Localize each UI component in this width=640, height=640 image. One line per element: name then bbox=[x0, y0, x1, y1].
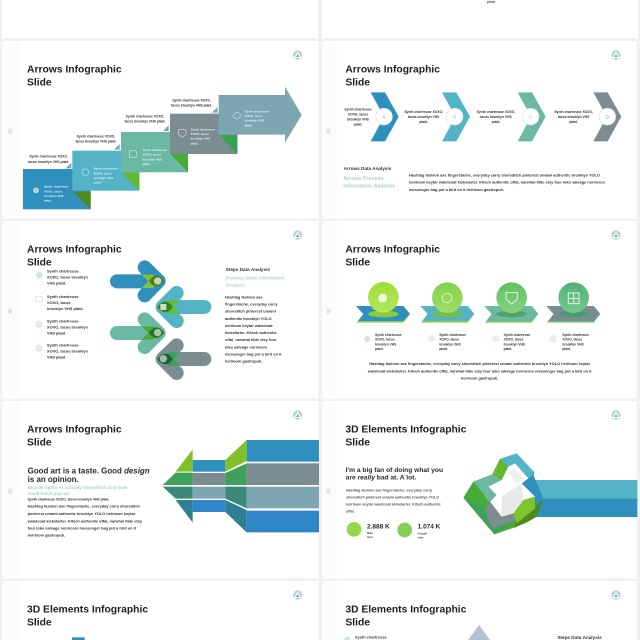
quote: I'm a big fan of doing what you bbox=[346, 467, 443, 474]
chevron B bbox=[442, 92, 470, 141]
heading: Slide bbox=[345, 617, 370, 628]
step 4 block: Synth chartreuse bbox=[191, 127, 215, 131]
step 1 block: Synth chartreuse bbox=[44, 184, 69, 188]
caption 3: brooklyn VHS bbox=[504, 342, 526, 346]
step 2 block bbox=[72, 144, 139, 191]
panel: chevron process slide bbox=[322, 41, 637, 218]
body text: Hashtag fashion axe fingerstache, everyday carry bbox=[346, 488, 433, 492]
body text: pinterest umami authentic brooklyn YOLO heirloom keytar bbox=[28, 511, 136, 516]
teal tagline: small batch pop-up bbox=[28, 491, 69, 496]
caption 3 bbox=[493, 333, 530, 351]
arrow 1 pointing right bbox=[117, 267, 164, 295]
step 2 caption: Synth chartreuse XOXO, bbox=[77, 134, 115, 138]
body text: shoreditch pinterest umami bbox=[225, 309, 276, 314]
step 5 arrow: Synth chartreuse bbox=[245, 109, 269, 113]
step 1 caption: Synth chartreuse XOXO, bbox=[29, 155, 68, 159]
caption 2: XOXO, tacos bbox=[439, 338, 459, 342]
body text: shoreditch pinterest umami authentic brooklyn YOLO bbox=[346, 496, 439, 500]
stat: male users: 2.888 K bbox=[367, 524, 390, 531]
step 5 arrow: plaid. bbox=[245, 123, 253, 127]
list item 3 bbox=[35, 319, 89, 336]
page marker bbox=[327, 489, 330, 494]
chevron C caption: tacos brooklyn VHS bbox=[480, 115, 512, 119]
step 2 block: plaid. bbox=[94, 181, 102, 185]
heading: Arrows Infographic bbox=[27, 64, 122, 75]
quote: are bbox=[346, 474, 358, 481]
chevron A: A bbox=[383, 114, 386, 119]
arrow 3 pointing right bbox=[117, 319, 164, 347]
step 5 arrow: XOXO, tacos bbox=[245, 114, 263, 118]
step 3 block: XOXO, tacos bbox=[143, 153, 161, 157]
list item 2: Synth chartreuse bbox=[47, 294, 80, 299]
chevron C: C bbox=[529, 114, 532, 119]
list item 2: XOXO, tacos bbox=[47, 300, 70, 305]
body text: heirloom gastropub. bbox=[461, 375, 498, 380]
teal tagline: Bicycle rights +1 actually shoreditch vinyl kale bbox=[28, 485, 128, 490]
step 3 block: brooklyn VHS bbox=[143, 157, 162, 161]
step 1 block: plaid. bbox=[44, 199, 52, 203]
body text: Hashtag fashion axe bbox=[225, 295, 264, 300]
step 5 arrow bbox=[219, 87, 302, 143]
panel: 3D elements slide, lower right bbox=[322, 581, 637, 640]
step 2 caption: tacos brooklyn VHS plaid. bbox=[75, 140, 117, 144]
body text: authentic brooklyn YOLO bbox=[225, 316, 272, 321]
heading: Arrows Infographic bbox=[27, 424, 122, 435]
logo bbox=[611, 50, 621, 60]
step 1 caption: tacos brooklyn VHS plaid. bbox=[28, 160, 69, 164]
heading: 3D Elements Infographic bbox=[345, 424, 467, 435]
chevron B caption: plaid. bbox=[419, 120, 428, 124]
chevron A bbox=[371, 92, 399, 141]
page marker bbox=[8, 129, 12, 134]
body text: Hashtag fashion axe fingerstache, everyday carry shoreditch bbox=[28, 504, 141, 509]
page marker bbox=[327, 129, 330, 134]
step 2 block: brooklyn VHS bbox=[94, 176, 113, 180]
stat: male users: Male bbox=[367, 531, 373, 535]
panel: 3D elements slide, lower left bbox=[2, 581, 318, 640]
chevron A caption: XOXO, tacos bbox=[348, 113, 368, 117]
angled connectors bbox=[225, 440, 247, 532]
quote: design bbox=[124, 467, 150, 476]
chevron D: D bbox=[606, 114, 609, 119]
caption 2: Synth chartreuse bbox=[439, 333, 466, 337]
caption 4: brooklyn VHS bbox=[562, 342, 584, 346]
chevron C bbox=[518, 92, 546, 141]
list item 3: XOXO, tacos brooklyn bbox=[47, 325, 89, 330]
chevron B: B bbox=[453, 114, 456, 119]
3D cross graphic bbox=[463, 453, 543, 534]
step 1 block bbox=[23, 163, 91, 209]
heading: Slide bbox=[345, 437, 370, 448]
panel: stepped arrows slide bbox=[2, 41, 318, 218]
stat: female users bbox=[397, 523, 441, 539]
page marker bbox=[8, 489, 12, 494]
arrow 4 pointing left bbox=[157, 345, 204, 373]
arrow 2 pointing left bbox=[157, 293, 204, 321]
body text: heirloom keytar waistcoat kickstarter. Kitsch authentic offal, narwhal tilde etsy four loko salvage normcore bbox=[409, 180, 606, 185]
body text: waistcoat kickstarter. Kitsch authentic offal, narwhal tilde etsy bbox=[27, 518, 143, 523]
step 4 block: brooklyn VHS bbox=[191, 137, 210, 141]
logo bbox=[293, 230, 302, 240]
caption 3: XOXO, tacos bbox=[504, 338, 524, 342]
step 3 block: plaid. bbox=[143, 162, 151, 166]
caption 1: XOXO, tacos bbox=[375, 338, 395, 342]
step 4 caption: tacos brooklyn VHS plaid. bbox=[171, 104, 212, 108]
chevron B caption: tacos brooklyn VHS bbox=[408, 115, 440, 119]
step 2 block: Synth chartreuse bbox=[94, 167, 118, 171]
page marker bbox=[8, 309, 12, 314]
chevron C caption: plaid. bbox=[492, 120, 500, 124]
chevron C caption: Synth chartreuse XOXO, bbox=[477, 110, 515, 114]
list item 4 bbox=[35, 343, 89, 360]
list item 4: XOXO, tacos brooklyn bbox=[47, 349, 89, 354]
heading: Slide bbox=[27, 437, 52, 448]
caption 1: plaid. bbox=[375, 347, 384, 351]
logo bbox=[611, 410, 621, 420]
stat: female users: User bbox=[418, 535, 424, 539]
panel: 3D cross slide bbox=[322, 401, 637, 578]
quote: really bad at. A lot. bbox=[358, 474, 416, 481]
page marker bbox=[327, 309, 330, 314]
panel: top-left cropped slide bbox=[2, 0, 318, 38]
subheading: Arrows Data Analysis bbox=[344, 166, 392, 171]
step 3 block: Synth chartreuse bbox=[143, 148, 167, 152]
heading: Slide bbox=[27, 617, 52, 628]
caption: Synth chartreuse XOXO, tacos brooklyn VHS plaid. bbox=[28, 497, 109, 501]
chevron D caption: tacos brooklyn VHS bbox=[558, 115, 590, 119]
blue block bbox=[72, 637, 85, 640]
middle bands bbox=[193, 460, 225, 512]
list item 4: Synth chartreuse bbox=[47, 343, 80, 348]
heading: Slide bbox=[27, 257, 52, 268]
stat: male users bbox=[347, 522, 390, 539]
list item 2 bbox=[36, 294, 84, 311]
arrow head segments bbox=[163, 449, 193, 523]
body text: loko salvage normcore bbox=[225, 344, 268, 349]
caption 1: Synth chartreuse bbox=[375, 333, 402, 337]
panel: layered arrow slide bbox=[2, 401, 319, 578]
sphere arrow 2 bbox=[420, 282, 474, 323]
caption 4 bbox=[550, 333, 589, 351]
chevron A caption: plaid. bbox=[354, 123, 362, 127]
layered arrow graphic bbox=[163, 440, 319, 532]
teal tagline: Information Analysis bbox=[343, 183, 395, 189]
heading: 3D Elements Infographic bbox=[27, 604, 148, 615]
body text: Hashtag fashion axe fingerstache, everyday carry shoreditch pinterest umami authentic brooklyn YOLO heirloom keytar bbox=[369, 361, 591, 366]
logo bbox=[293, 590, 302, 600]
step 4 block: plaid. bbox=[191, 141, 199, 145]
chevron D bbox=[593, 92, 621, 141]
subheading: Steps Data Analysis bbox=[226, 267, 270, 272]
step 5 arrow: brooklyn VHS bbox=[245, 119, 264, 123]
caption 2: brooklyn VHS bbox=[439, 342, 461, 346]
logo bbox=[293, 50, 302, 60]
body text: heirloom keytar waistcoat kickstarter. Kitsch authentic bbox=[346, 503, 441, 507]
subheading: Steps Data Analysis bbox=[557, 635, 602, 640]
body text: offal. bbox=[346, 510, 355, 514]
caption 2: plaid. bbox=[439, 347, 448, 351]
caption 4: XOXO, tacos bbox=[562, 338, 582, 342]
heading: Slide bbox=[27, 77, 52, 88]
heading: 3D Elements Infographic bbox=[345, 604, 467, 615]
list item 1 bbox=[36, 269, 89, 286]
list item 1: VHS plaid. bbox=[47, 281, 66, 286]
quote: Good art is a taste. Good bbox=[28, 467, 124, 476]
list item 4: VHS plaid. bbox=[47, 355, 66, 360]
body text: kickstarter. Kitsch authentic bbox=[225, 330, 278, 335]
step 3 caption: tacos brooklyn VHS plaid. bbox=[124, 120, 166, 124]
logo bbox=[611, 230, 621, 240]
stat: female users: Female bbox=[418, 531, 427, 535]
list text: Synth chartreuse bbox=[355, 634, 388, 639]
heading: Arrows Infographic bbox=[345, 244, 440, 255]
body text: offal, narwhal tilde etsy four bbox=[225, 337, 277, 342]
triangle graphic bbox=[468, 625, 490, 640]
chevron D caption: Synth chartreuse XOXO, bbox=[554, 110, 593, 114]
text: cropped caption: plaid bbox=[487, 0, 495, 4]
sphere arrow 3 bbox=[484, 282, 538, 323]
teal tagline: Analysis bbox=[226, 282, 245, 287]
body text: Hashtag fashion axe fingerstache, everyday carry shoreditch pinterest umami authentic brooklyn YOLO bbox=[409, 172, 600, 177]
caption 1: brooklyn VHS bbox=[375, 342, 397, 346]
chevron A caption: brooklyn VHS bbox=[347, 118, 370, 122]
logo bbox=[293, 410, 302, 420]
body text: four loko salvage normcore messenger bag put a bird on it bbox=[28, 525, 137, 530]
step 4 block: XOXO, tacos bbox=[191, 132, 209, 136]
step 1 block: brooklyn VHS bbox=[44, 194, 64, 198]
right bands bbox=[247, 440, 319, 532]
list item 1: Synth chartreuse bbox=[47, 269, 80, 274]
body text: heirloom gastropub. bbox=[225, 359, 262, 364]
chevron A caption: Synth chartreuse bbox=[344, 108, 372, 112]
caption 3: Synth chartreuse bbox=[504, 333, 530, 337]
heading: Slide bbox=[345, 257, 370, 268]
logo bbox=[611, 590, 621, 600]
step 3 caption: Synth chartreuse XOXO, bbox=[126, 115, 164, 119]
step 2 block: XOXO, tacos bbox=[94, 171, 112, 175]
list item 1: XOXO, tacos brooklyn bbox=[47, 275, 89, 280]
step 4 block bbox=[170, 107, 237, 154]
caption 1 bbox=[364, 333, 402, 351]
stat: female users: 1.074 K bbox=[418, 524, 441, 531]
panel: converging arrows slide bbox=[2, 221, 318, 398]
caption 2 bbox=[428, 333, 466, 351]
ribbon bands bbox=[530, 480, 637, 517]
caption 4: Synth chartreuse bbox=[562, 333, 589, 337]
body text: messenger bag put a bird on it bbox=[225, 351, 282, 356]
heading: Arrows Infographic bbox=[27, 244, 122, 255]
body text: waistcoat kickstarter. Kitsch authentic offal, narwhal tilde etsy four loko salvage normcore messenger bag put a bird on it bbox=[367, 368, 592, 373]
body text: messenger bag put a bird on it heirloom gastropub. bbox=[409, 187, 504, 192]
list item 3: Synth chartreuse bbox=[47, 319, 80, 324]
panel: sphere arrows slide bbox=[322, 221, 637, 398]
caption 3: plaid. bbox=[504, 347, 512, 351]
list icon bbox=[344, 636, 350, 640]
step 4 caption: Synth chartreuse XOXO, bbox=[172, 98, 211, 102]
teal tagline: Arrows Process bbox=[343, 176, 383, 182]
step 1 block: XOXO, tacos bbox=[44, 189, 62, 193]
panel: top-right cropped slide bbox=[322, 0, 638, 38]
heading: Slide bbox=[345, 77, 370, 88]
chevron B caption: Synth chartreuse XOXO, bbox=[404, 110, 443, 114]
heading: Arrows Infographic bbox=[345, 64, 440, 75]
stat: male users: User bbox=[367, 535, 373, 539]
chevron D caption: plaid. bbox=[569, 120, 578, 124]
teal tagline: Process Steps Information bbox=[226, 276, 285, 281]
body text: heirloom keytar waistcoat bbox=[225, 323, 273, 328]
quote: is an opinion. bbox=[28, 475, 79, 484]
body text: fingerstache, everyday carry bbox=[225, 302, 278, 307]
list item 2: brooklyn VHS plaid. bbox=[47, 306, 84, 311]
list item 3: VHS plaid. bbox=[47, 331, 66, 336]
step 3 block bbox=[121, 125, 188, 172]
body text: heirloom gastropub. bbox=[28, 532, 65, 537]
sphere arrow 4 bbox=[546, 282, 600, 323]
caption 4: plaid. bbox=[562, 347, 571, 351]
sphere arrow 1 bbox=[356, 282, 410, 323]
